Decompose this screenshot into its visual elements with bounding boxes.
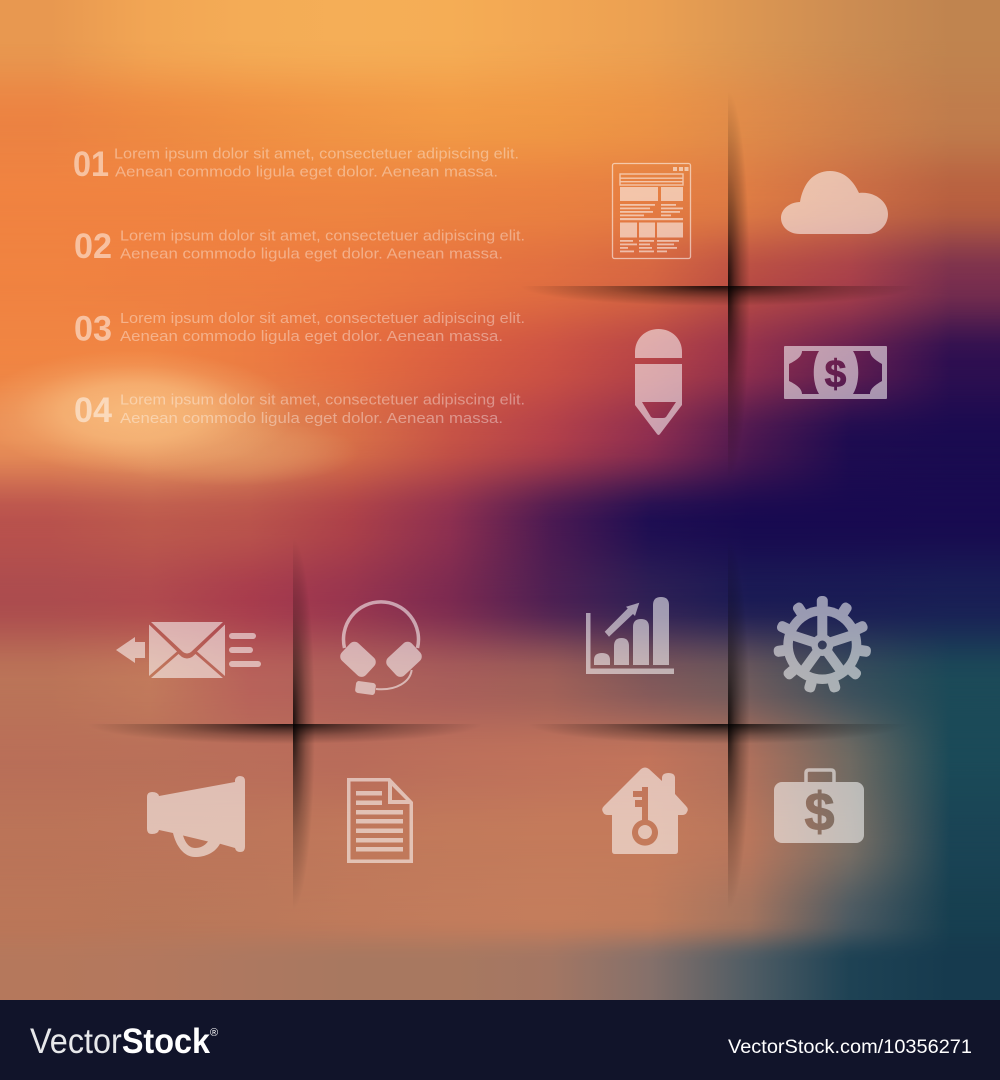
background: sand glow under text xyxy=(100,418,360,486)
item 04: 04 xyxy=(74,391,113,430)
icon: growth chart xyxy=(586,597,674,674)
icon: cloud xyxy=(781,171,888,234)
item 02: Aenean commodo ligula eget dolor. Aenean massa. xyxy=(120,246,503,262)
item 03: Aenean commodo ligula eget dolor. Aenean massa. xyxy=(120,328,503,345)
item 01: 01 xyxy=(73,145,109,184)
footer band xyxy=(0,1000,1000,1080)
icon: briefcase with dollar xyxy=(774,770,864,843)
item 03: Lorem ipsum dolor sit amet, consectetuer adipiscing elit. xyxy=(120,310,525,327)
icon: web page layout xyxy=(612,164,690,258)
icon: pencil xyxy=(635,329,682,435)
footer logo: registered mark: ® xyxy=(210,1027,218,1039)
item 02: Lorem ipsum dolor sit amet, consectetuer adipiscing elit. xyxy=(120,228,525,244)
item 02 xyxy=(74,227,525,266)
item 03: 03 xyxy=(74,310,112,348)
icon: banknote xyxy=(784,346,887,399)
icon: headset xyxy=(338,602,424,695)
item 03 xyxy=(74,310,525,348)
item 02: 02 xyxy=(74,227,112,266)
panel shadows: top right crossing xyxy=(532,104,896,449)
item 01: Aenean commodo ligula eget dolor. Aenean massa. xyxy=(115,164,498,180)
icon: gear xyxy=(773,596,872,694)
item 04 xyxy=(74,391,525,430)
item 01 xyxy=(73,145,519,184)
icon: house with key xyxy=(602,768,688,854)
background: sand glow left xyxy=(0,350,295,474)
icon: document xyxy=(347,778,413,863)
panel shadows: lower left crossing xyxy=(102,553,468,896)
item 01: Lorem ipsum dolor sit amet, consectetuer adipiscing elit. xyxy=(114,146,519,162)
panel shadows: lower right crossing xyxy=(543,570,879,894)
footer link text: VectorStock.com/10356271 xyxy=(728,1037,972,1058)
text block: numbered list xyxy=(73,145,525,430)
item 04: Aenean commodo ligula eget dolor. Aenean massa. xyxy=(120,410,503,427)
footer logo: VectorStock: VectorStock xyxy=(30,1022,210,1061)
icon: megaphone xyxy=(147,776,245,857)
icon: envelope with arrow xyxy=(116,622,261,678)
item 04: Lorem ipsum dolor sit amet, consectetuer adipiscing elit. xyxy=(120,392,525,408)
